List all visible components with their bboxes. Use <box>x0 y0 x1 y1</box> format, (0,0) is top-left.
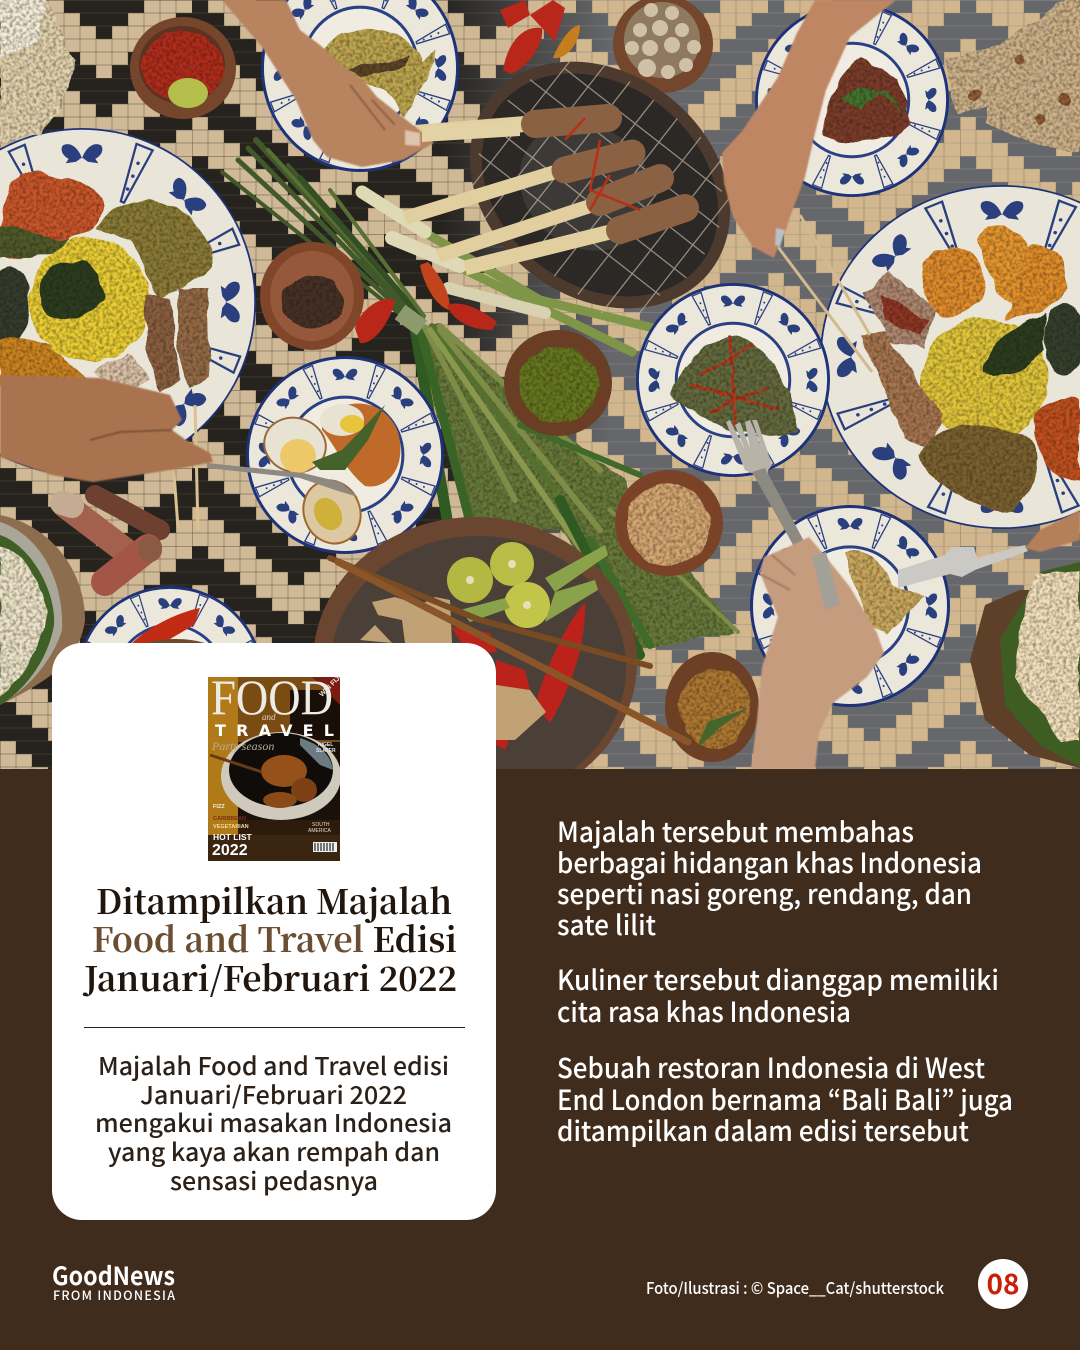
sambal <box>142 31 224 101</box>
magazine cover: Food and Travel: NIGEL <box>318 742 333 748</box>
plate: top centre <box>261 0 459 172</box>
plate: top right with sambal matah <box>755 3 949 197</box>
bamboo stick held in the top hand <box>422 120 520 142</box>
rice stalks below the tie <box>415 326 738 655</box>
urap salad <box>672 335 796 435</box>
magazine cover: Food and Travel: FIZZ <box>213 804 225 810</box>
card heading: Ditampilkan Majalah <box>96 875 452 924</box>
magazine cover: Food and Travel: VEGETARIAN <box>213 824 249 830</box>
bowl: green sambal <box>504 330 612 436</box>
lime slices <box>447 542 550 628</box>
paragraph 3: Sebuah restoran Indonesia di West <box>557 1046 985 1086</box>
serving dish with lime, ginger, cinnamon <box>313 517 688 807</box>
magazine cover: Food and Travel: 2022 <box>212 842 248 859</box>
red chilies <box>355 0 580 343</box>
card body text: Majalah Food and Travel edisi <box>98 1048 449 1083</box>
hand: top right <box>722 0 896 258</box>
card body text: mengakui masakan Indonesia <box>95 1105 452 1140</box>
fork handle in bottom hand <box>812 552 840 610</box>
magazine cover: Food and Travel: SLATER <box>316 748 336 754</box>
page number badge <box>978 1259 1028 1309</box>
brown background band <box>0 769 1080 1350</box>
magazine cover: Food and Travel: HOT LIST <box>213 832 253 842</box>
plate: middle with green urap <box>636 283 830 477</box>
card heading <box>82 875 457 1001</box>
lemongrass pieces <box>460 545 608 622</box>
plate food: fritters, rice, satay, curry <box>860 226 1080 512</box>
fork tines and handle <box>726 420 772 478</box>
card body text: sensasi pedasnya <box>170 1163 378 1198</box>
white card <box>52 643 496 1220</box>
cloves <box>282 274 342 330</box>
chilies <box>451 602 585 750</box>
magazine cover: Food and Travel: CARIBBEAN <box>213 816 246 822</box>
hand: bottom right <box>751 510 1080 769</box>
paragraph 2: cita rasa khas Indonesia <box>557 990 851 1030</box>
satay meat <box>535 118 685 230</box>
paragraph 1: seperti nasi goreng, rendang, dan <box>557 872 972 912</box>
cracker: top left rempeyek <box>0 0 75 145</box>
martabak <box>322 30 436 118</box>
page number badge: 08 <box>986 1263 1020 1303</box>
bowl: fried shallots <box>615 470 723 576</box>
photo credit: Foto/Ilustrasi : © Space__Cat/shutterstock <box>646 1275 945 1299</box>
card heading: Januari/Februari 2022 <box>82 952 457 1001</box>
lemongrass stalks <box>426 232 654 332</box>
plate: large left with yellow rice <box>0 128 256 476</box>
paragraph 2 <box>557 958 999 1030</box>
turmeric root <box>62 495 160 582</box>
magazine cover: Food and Travel: Party season <box>211 739 274 753</box>
paragraph 3: End London bernama “Bali Bali” juga <box>557 1078 1013 1118</box>
bamboo skewers <box>778 215 872 372</box>
grill pan with satay lilit <box>405 11 779 359</box>
card body text <box>95 1048 452 1198</box>
right column paragraphs <box>557 810 1013 1149</box>
plate food: rice, chicken, shrimp, satay <box>0 170 215 393</box>
shallots <box>626 484 710 566</box>
plate: bottom left with chili <box>84 586 256 643</box>
cracker basket: bottom right <box>970 562 1080 768</box>
ginger <box>360 597 546 740</box>
plate: large right with orange fritters <box>778 185 1080 529</box>
magazine cover: Food and Travel: FOOD <box>211 669 333 725</box>
hand: left <box>0 375 213 482</box>
paragraph 1: berbagai hidangan khas Indonesia <box>557 841 982 881</box>
green sauce <box>519 347 599 423</box>
magazine cover: Food and Travel: WIN FIJI <box>318 674 343 698</box>
card body text: Januari/Februari 2022 <box>140 1077 407 1112</box>
paragraph 1 <box>557 810 982 943</box>
paragraph 3: ditampilkan dalam edisi tersebut <box>557 1109 969 1149</box>
martabak <box>845 550 925 635</box>
plate: eggs <box>246 356 444 554</box>
magazine cover: Food and Travel <box>208 669 343 861</box>
logo: GoodNews from Indonesia: FROM INDONESIA <box>53 1285 175 1304</box>
paragraph 1: sate lilit <box>557 903 656 943</box>
magazine cover: Food and Travel: AMERICA <box>308 828 331 834</box>
forks <box>726 420 1028 588</box>
card body text: yang kaya akan rempah dan <box>108 1134 440 1169</box>
paragraph 1: Majalah tersebut membahas <box>557 810 914 850</box>
bundle tie <box>400 312 422 328</box>
candlenuts <box>625 3 701 79</box>
divider <box>84 1027 465 1028</box>
bowl: cloves <box>260 242 364 350</box>
logo: GoodNews from Indonesia: GoodNews <box>52 1257 175 1293</box>
bowl: candlenuts <box>613 0 713 93</box>
paragraph 3 <box>557 1046 1013 1149</box>
rice stalk mass <box>415 325 735 650</box>
egg halves <box>258 404 400 552</box>
cracker: top right peanut rempeyek <box>945 0 1080 152</box>
magazine cover: Food and Travel: and <box>262 712 276 722</box>
bowl: red sambal with lime <box>130 17 236 119</box>
cracker basket: bottom left <box>0 515 85 705</box>
sauce <box>680 668 750 748</box>
salad with basil <box>822 58 912 142</box>
card heading: Food and Travel Edisi <box>92 913 457 962</box>
rice stalks and lemongrass bundle <box>222 140 738 655</box>
lime <box>168 78 208 108</box>
hand: top centre <box>222 0 434 167</box>
paragraph 2: Kuliner tersebut dianggap memiliki <box>557 958 999 998</box>
bowl: peanut sauce <box>665 652 759 762</box>
hero photo: Indonesian food spread <box>0 0 1080 807</box>
cinnamon sticks <box>330 558 688 742</box>
satay sticks <box>405 124 610 268</box>
plate: bottom right with martabak <box>750 505 950 707</box>
wooden sticks and spoon <box>174 405 358 530</box>
lemongrass leaves above the tie <box>222 140 424 322</box>
woven bamboo table mat <box>0 0 1080 769</box>
magazine cover: Food and Travel: SOUTH <box>312 822 330 828</box>
magazine cover: Food and Travel: TRAVEL <box>215 721 334 740</box>
